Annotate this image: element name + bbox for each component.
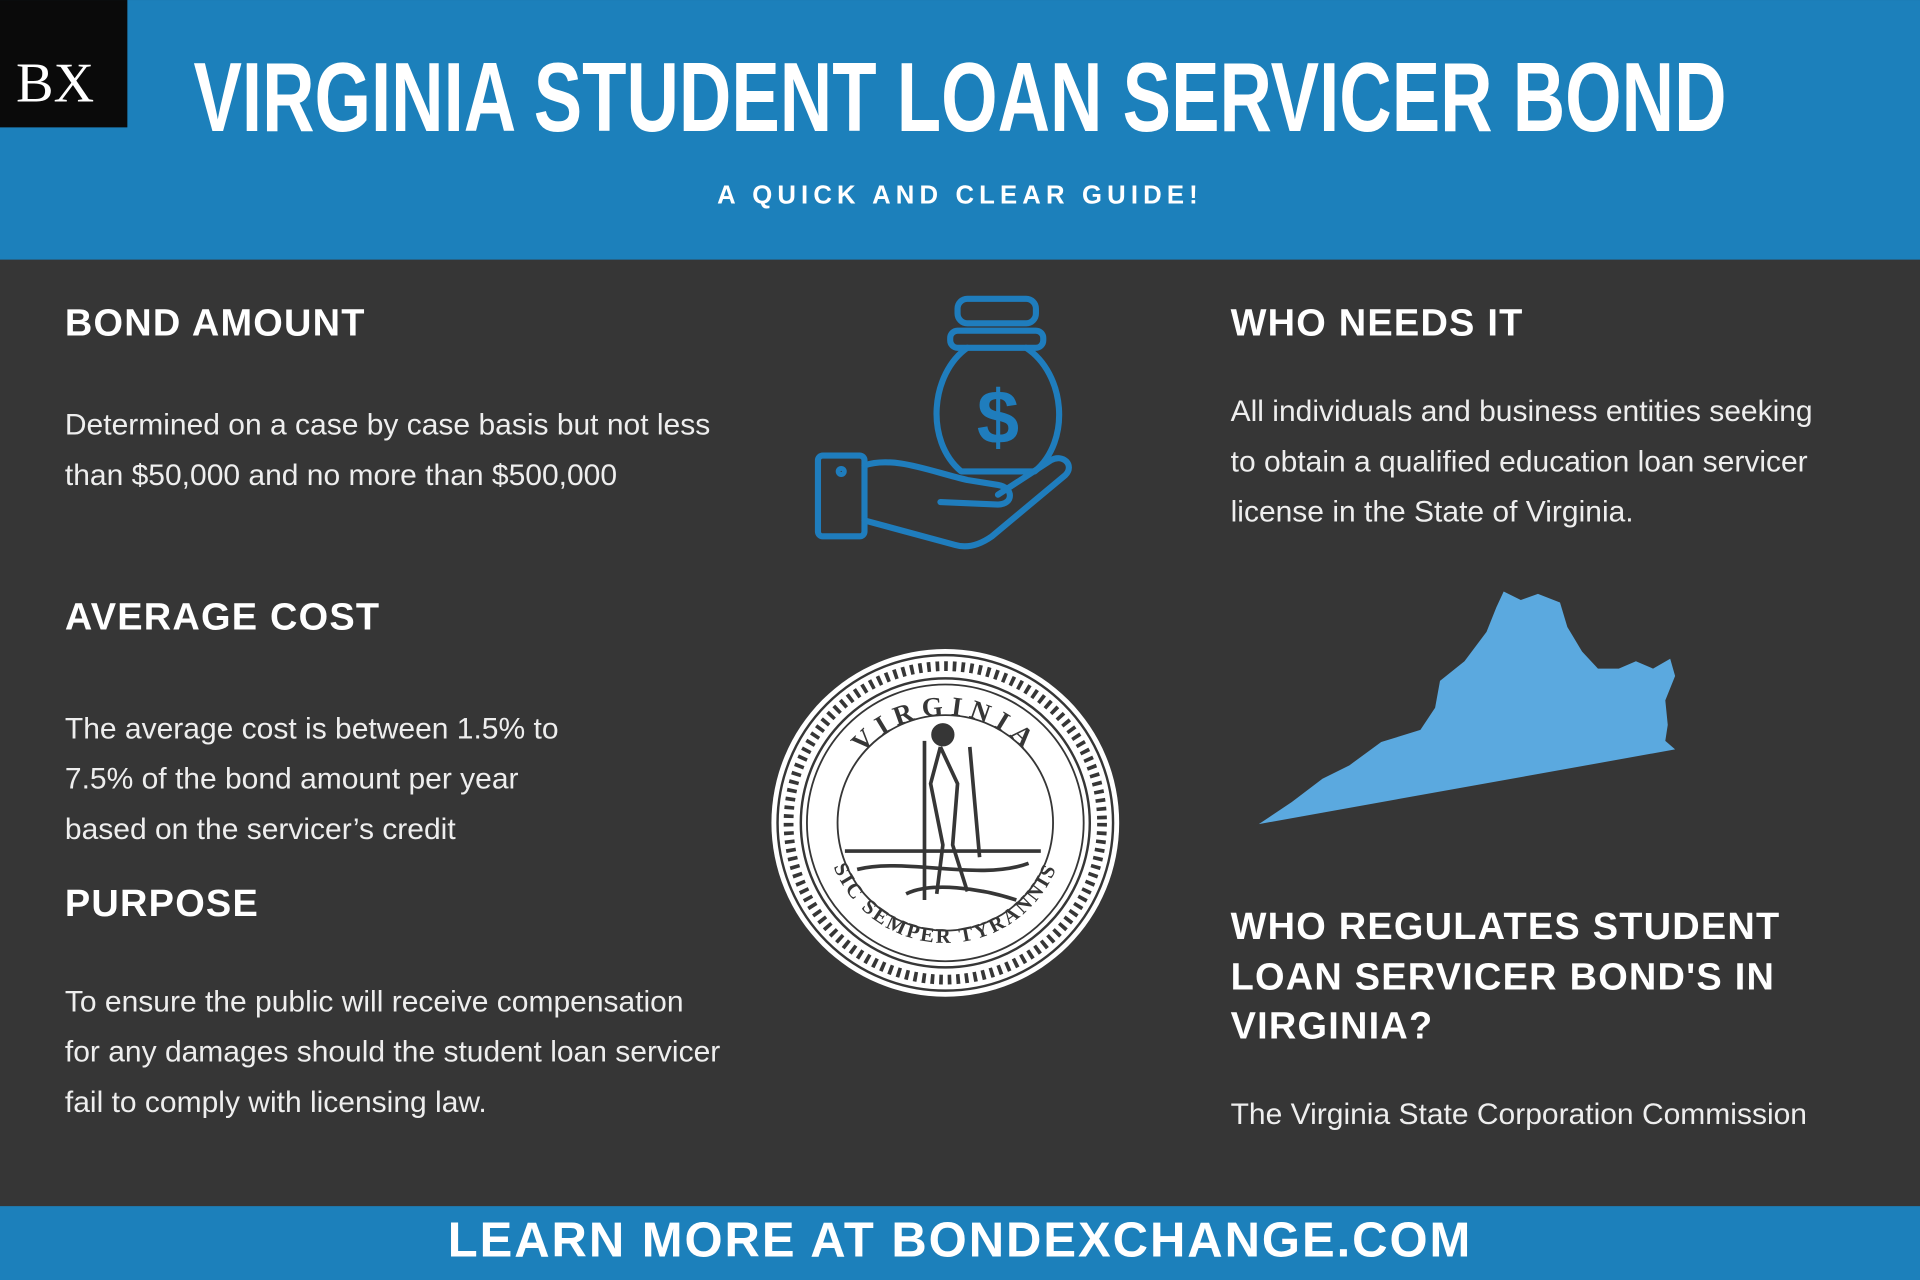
icon: Virginia seal: SIC SEMPER TYRANNIS	[834, 863, 1054, 943]
section: purpose: for any damages should the student loan servicer	[65, 1036, 720, 1069]
section: who needs it	[1231, 303, 1813, 529]
section: average cost: 7.5% of the bond amount per year	[65, 763, 519, 796]
section: who regulates: LOAN SERVICER BOND'S IN	[1231, 956, 1775, 998]
section: who needs it: WHO NEEDS IT	[1231, 303, 1524, 345]
section: bond amount: BOND AMOUNT	[65, 303, 366, 345]
section: who regulates: VIRGINIA?	[1231, 1005, 1433, 1047]
section: bond amount: than $50,000 and no more than $500,000	[65, 459, 617, 492]
section: purpose: To ensure the public will receive compensation	[65, 985, 684, 1018]
section: average cost: based on the servicer’s credit	[65, 813, 456, 846]
section: who needs it: to obtain a qualified education loan servicer	[1231, 445, 1808, 478]
section: who needs it: All individuals and business entities seeking	[1231, 395, 1813, 428]
section: purpose: PURPOSE	[65, 883, 259, 925]
section: bond amount: Determined on a case by case basis but not less	[65, 409, 710, 442]
logo BX: BX	[16, 53, 94, 115]
icon: Virginia seal	[771, 649, 1120, 997]
footer	[0, 1206, 1920, 1280]
subtitle: A QUICK AND CLEAR GUIDE!	[717, 181, 1203, 209]
section: purpose: fail to comply with licensing law.	[65, 1086, 487, 1119]
logo BX	[0, 0, 127, 127]
section: who regulates: The Virginia State Corporation Commission	[1231, 1098, 1807, 1131]
section: who regulates: WHO REGULATES STUDENT	[1231, 906, 1780, 948]
section: average cost	[65, 596, 559, 846]
icon: hand holding money bag: $	[977, 375, 1019, 460]
section: average cost: The average cost is between 1.5% to	[65, 712, 559, 745]
icon: hand holding money bag	[818, 299, 1069, 546]
footer: LEARN MORE AT BONDEXCHANGE.COM	[448, 1213, 1472, 1267]
section: who regulates	[1231, 906, 1807, 1131]
section: bond amount	[65, 303, 710, 492]
section: purpose	[65, 883, 720, 1119]
header band	[0, 0, 1920, 260]
section: average cost: AVERAGE COST	[65, 596, 380, 638]
icon: Virginia seal: VIRGINIA	[850, 698, 1030, 748]
icon: Virginia state map	[1259, 591, 1675, 824]
section: who needs it: license in the State of Virginia.	[1231, 496, 1634, 529]
